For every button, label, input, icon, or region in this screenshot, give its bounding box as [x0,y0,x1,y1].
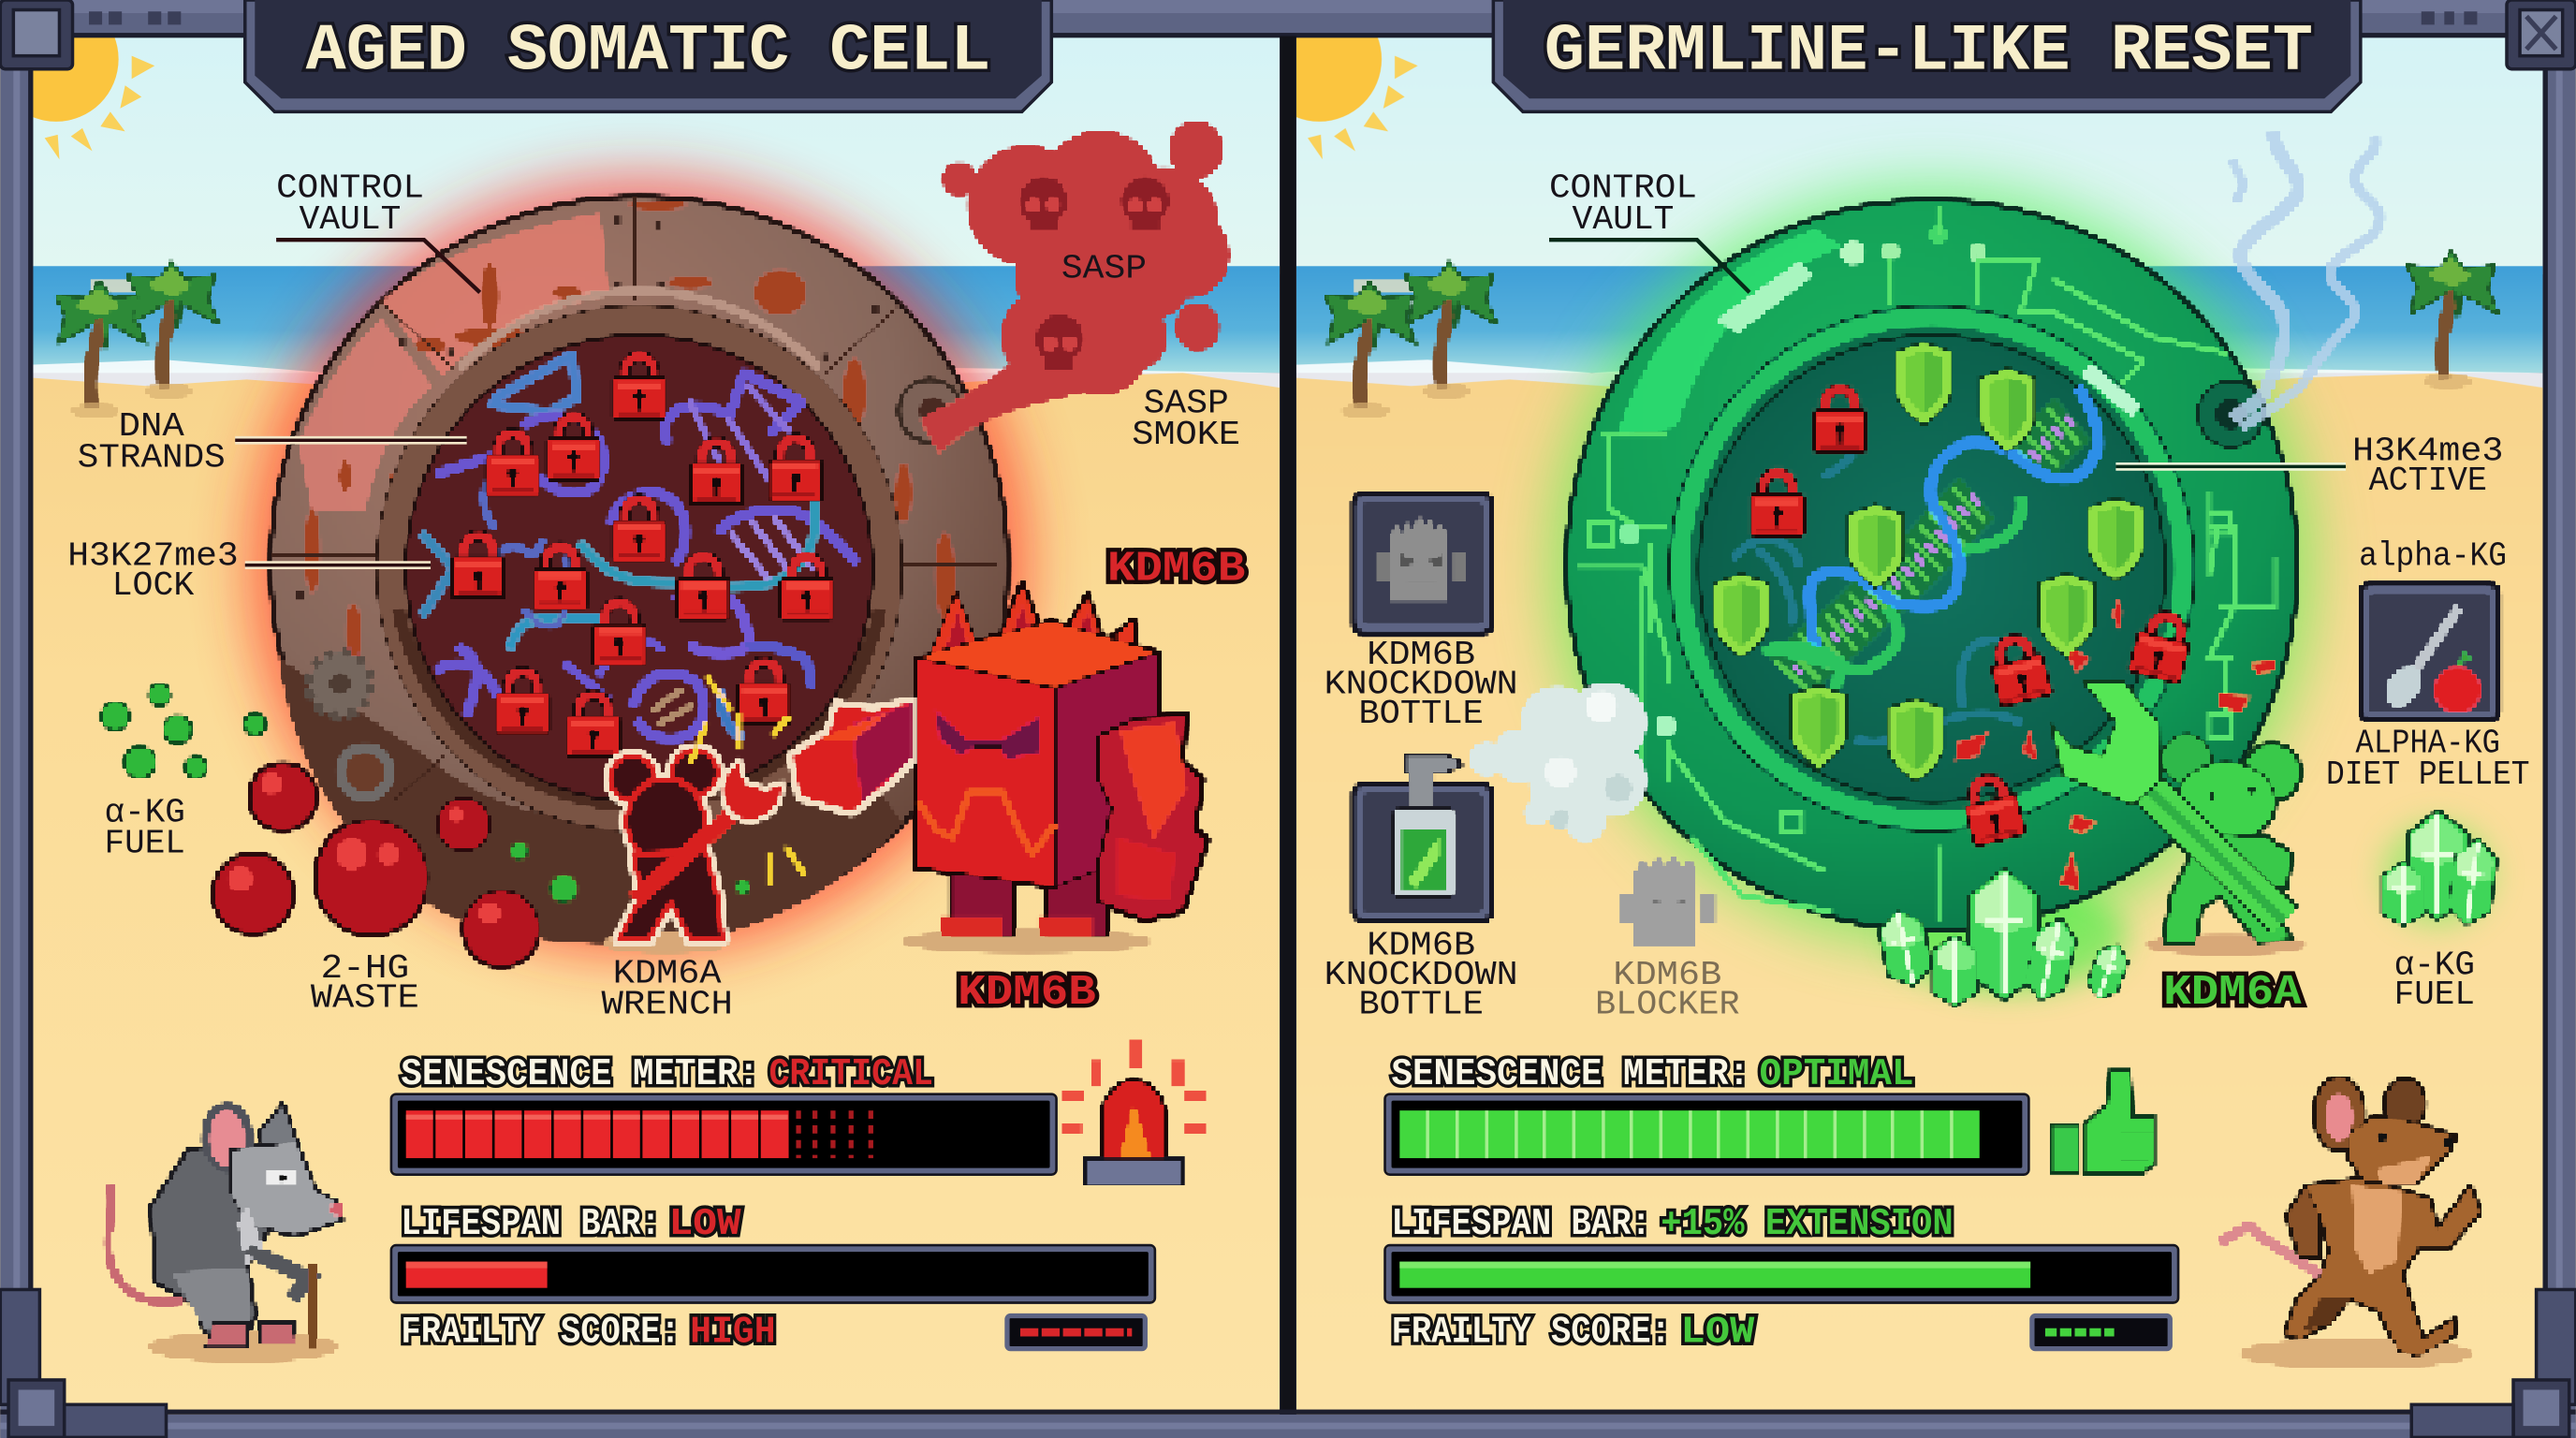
label H3K27me3 lock [67,537,431,605]
lifespan text right [1392,1203,1954,1246]
frailty text left: HIGH [690,1312,776,1355]
label knockdown bottle lower [1325,926,1518,1024]
label alpha-KG fuel right: α-KG [2394,946,2475,985]
panel: germline-like reset [1257,0,2543,1416]
label knockdown bottle lower: BOTTLE [1358,986,1484,1024]
control vault green ring [1567,200,2296,930]
palms left [56,263,217,418]
label alpha-KG diet pellet: DIET PELLET [2326,756,2530,794]
senescence meter text right: OPTIMAL [1760,1053,1914,1096]
frailty text right: FRAILTY SCORE: [1392,1312,1671,1355]
gears on ring [309,653,389,797]
label dna strands: STRANDS [78,438,226,477]
vault glow green [1551,184,2313,946]
label 2-HG waste [311,949,419,1018]
SASP smoke cloud [899,122,1229,453]
label control vault: CONTROL [276,169,424,208]
alpha-KG pellet box [2361,585,2498,720]
label alpha-KG diet pellet: ALPHA-KG [2356,725,2500,763]
senescence meter bar right [1385,1094,2028,1175]
label control vault right: VAULT [1573,200,1674,239]
lifespan bar left [391,1245,1155,1302]
label alpha-KG fuel right [2394,946,2475,1014]
label control vault right [1549,169,1749,292]
label alpha-KG fuel left: FUEL [105,825,185,863]
label 2-HG waste: 2-HG [320,949,409,988]
pixel art layer right [1325,133,2499,1369]
label KDM6A: KDM6A [2163,968,2302,1017]
label KDM6B top: KDM6B [1107,544,1245,593]
steam wisps [2232,133,2380,427]
control vault rusty ring [271,198,1007,944]
label knockdown bottle upper: KDM6B [1367,636,1475,674]
label SASP smoke: SMOKE [1132,416,1240,454]
dna helix active [1734,388,2099,741]
senescence meter text right: SENESCENCE METER: [1392,1053,1749,1096]
vault glow red [252,178,1027,953]
label knockdown bottle upper [1325,636,1518,733]
label KDM6B blocker: BLOCKER [1595,986,1740,1024]
senescence meter text: CRITICAL [769,1053,933,1096]
label alpha-KG fuel left [105,793,185,863]
H3K27me3 locks [452,357,833,757]
lifespan text left: LOW [668,1203,742,1246]
title plate: germline-like reset: GERMLINE-LIKE RESET [1544,16,2313,90]
KDM6B knockdown box with ghost blocker [1354,494,1492,633]
title plate: aged somatic cell: AGED SOMATIC CELL [306,16,990,90]
label knockdown bottle lower: KDM6B [1367,926,1475,964]
crystal glow [1889,881,2126,992]
label knockdown bottle upper: KNOCKDOWN [1325,665,1518,703]
lifespan text left: LIFESPAN BAR: [401,1203,661,1246]
label H3K27me3 lock: H3K27me3 [67,537,239,576]
label dna strands [78,407,467,477]
dna strands tangled [424,355,855,739]
label H3K27me3 lock: LOCK [112,566,195,605]
healthy running mouse [2221,1078,2481,1369]
lifespan bar right [1385,1245,2178,1302]
old rat with cane [108,1104,344,1362]
label H3K4me3 active [2115,432,2503,500]
label knockdown bottle lower: KNOCKDOWN [1325,956,1518,994]
label KDM6A wrench: KDM6A [613,954,722,992]
label knockdown bottle upper: BOTTLE [1358,695,1484,733]
label SASP smoke [1132,384,1240,454]
label KDM6A wrench: WRENCH [602,986,733,1024]
thumbs up [2052,1071,2154,1173]
label KDM6B blocker [1595,956,1740,1024]
senescence meter text: SENESCENCE METER: [401,1053,759,1096]
label alpha-KG diet pellet [2326,725,2530,794]
label SASP smoke: SASP [1144,384,1229,422]
senescence meter bar [391,1094,1057,1175]
label SASP: SASP [1061,250,1147,288]
alpha-KG crystals [2382,811,2499,927]
label alpha-KG top: alpha-KG [2359,537,2507,576]
pixel art layer left [56,122,1229,966]
KDM6B red monster [789,583,1208,953]
beach scene left [0,0,1280,1416]
label control vault [276,169,480,292]
title plate: aged somatic cell [245,0,1051,111]
spray bottle box [1354,756,1492,920]
label H3K4me3 active: ACTIVE [2369,462,2487,500]
label alpha-KG fuel left: α-KG [105,793,185,831]
shields active marks [1713,342,2144,782]
lifespan text right: LIFESPAN BAR: [1392,1203,1651,1246]
KDM6B blocker ghost [1621,856,1715,945]
lifespan text right: +15% EXTENSION [1661,1203,1954,1246]
remaining and broken locks [1751,389,2276,890]
KDM6A wrench mouse [603,677,805,953]
label KDM6B blocker: KDM6B [1613,956,1721,994]
panel: aged somatic cell [0,0,1280,1416]
title plate: germline-like reset [1493,0,2361,111]
label alpha-KG fuel right: FUEL [2394,976,2475,1014]
label control vault: VAULT [300,200,401,239]
beach scene right [1257,0,2543,1416]
frailty text left: FRAILTY SCORE: [401,1312,681,1355]
label control vault right: CONTROL [1549,169,1697,208]
label KDM6A wrench [602,954,733,1024]
alarm siren [1061,1041,1206,1184]
2-HG waste spheres and alpha-KG fuel dots [102,685,749,966]
label H3K4me3 active: H3K4me3 [2352,432,2503,470]
frailty gauge right [2032,1316,2170,1349]
label KDM6B bottom: KDM6B [958,968,1096,1017]
central crystals [1876,868,2131,1005]
alpha-KG crystal glow [2382,821,2494,927]
palms right [1325,253,2496,418]
frailty gauge left [1007,1316,1145,1349]
label 2-HG waste: WASTE [311,979,419,1018]
frailty text right: LOW [1680,1312,1755,1355]
KDM6A green wrench mouse [2050,682,2305,954]
label dna strands: DNA [119,407,184,446]
spray cloud [1471,683,1647,841]
